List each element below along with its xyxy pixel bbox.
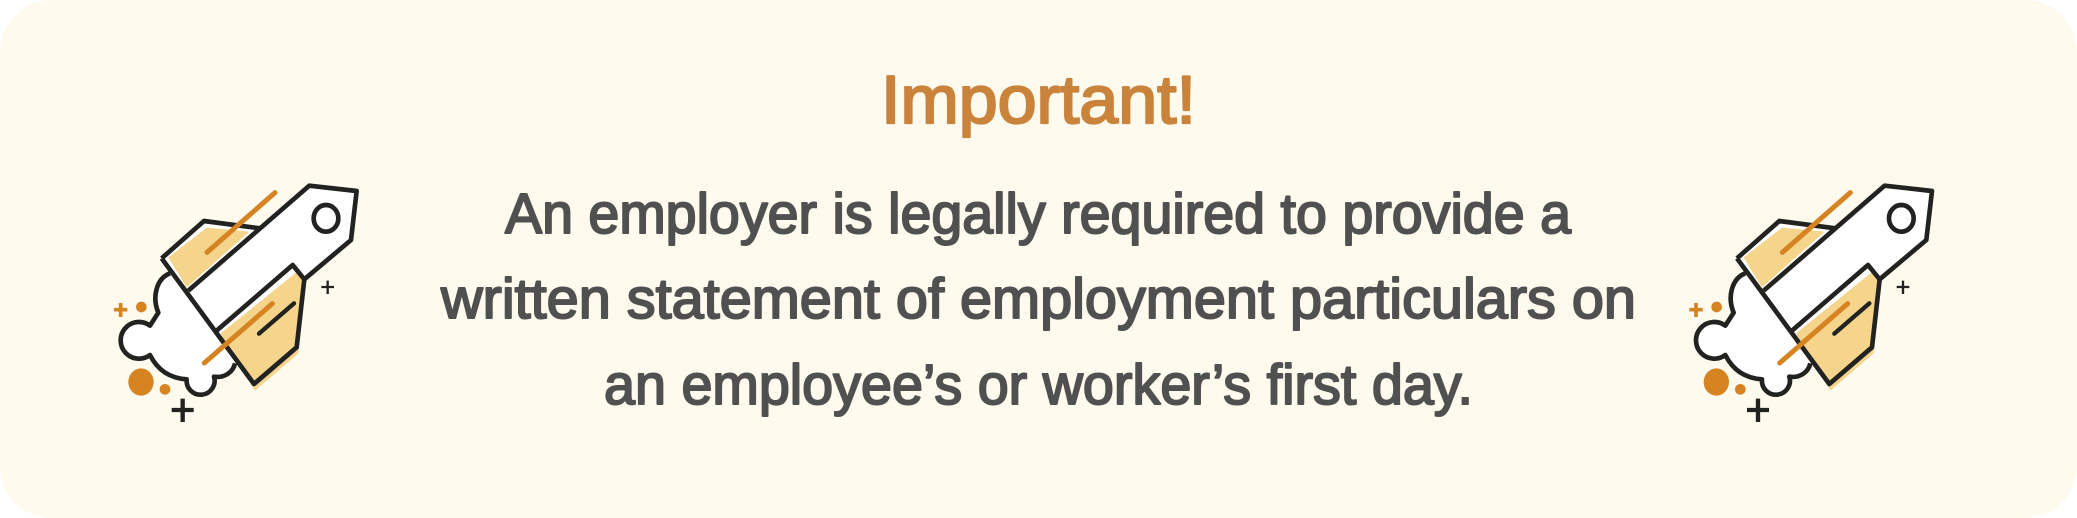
- body text: written statement of employment particulars on: [440, 267, 1636, 331]
- title: Important!: [881, 62, 1196, 138]
- body text: An employer is legally required to provide a: [505, 182, 1571, 246]
- body text: an employee’s or worker’s first day.: [604, 353, 1473, 417]
- icon: rocket left: [114, 186, 357, 422]
- icon: rocket right: [1689, 186, 1932, 422]
- body text: [440, 182, 1636, 417]
